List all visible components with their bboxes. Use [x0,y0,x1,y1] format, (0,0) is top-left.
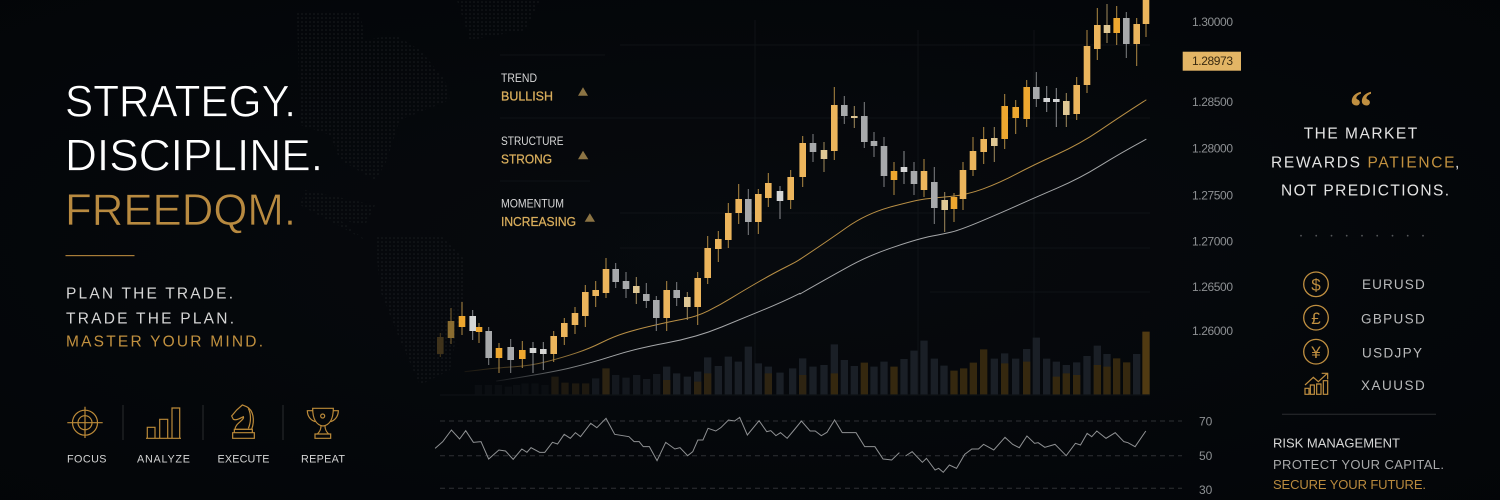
headline: DISCIPLINE. [65,132,323,181]
status: trend [501,73,588,104]
label: repeat: REPEAT [301,454,345,466]
RSI axis labels: 50 [1199,449,1213,463]
pair: USDJPY: USDJPY [1362,345,1422,360]
headline [65,78,323,235]
quote text: THE MARKET [1304,125,1418,142]
candlestick chart [437,0,1149,373]
pair: GBPUSD: GBPUSD [1361,311,1425,326]
volume bars [440,332,1150,395]
risk management note: RISK MANAGEMENT [1273,436,1400,451]
tagline [66,285,263,351]
icon: pound coin: £ [1311,309,1321,328]
icon: execute chess knight [232,405,254,438]
label: focus: FOCUS [67,454,106,466]
icon: analyze bars [146,408,181,438]
quote text [1271,125,1459,200]
quote text: , [1455,154,1459,171]
tagline: PLAN THE TRADE. [66,285,233,302]
icon: yen coin [1304,339,1328,364]
quote text: REWARDS [1271,154,1360,171]
icon: yen coin: ¥ [1310,343,1321,362]
risk management note: PROTECT YOUR CAPITAL. [1273,457,1444,472]
RSI levels [440,421,1182,488]
current price tag: 1.28973 [1192,54,1233,68]
risk management note: SECURE YOUR FUTURE. [1273,477,1426,492]
price axis: 1.28000 [1192,142,1233,156]
RSI axis labels: 70 [1199,414,1213,428]
current price tag [1183,52,1241,71]
quote text: PATIENCE [1368,154,1454,171]
icon: pound coin [1304,305,1328,330]
pair: EURUSD: EURUSD [1362,277,1425,292]
tagline: MASTER YOUR MIND. [66,334,263,351]
status: trend: TREND [501,73,537,85]
icon row dividers [123,405,283,440]
label: execute: EXECUTE [218,454,270,466]
icon: focus target [67,407,103,438]
RSI line [435,417,1146,472]
dotted separator [1301,235,1423,237]
price axis: 1.26500 [1192,280,1233,294]
price axis: 1.28500 [1192,95,1233,109]
icon: dollar coin: $ [1311,276,1321,294]
headline divider [66,255,134,256]
headline: FREEDQM. [65,186,296,235]
price axis: 1.30000 [1192,15,1233,29]
price axis: 1.27500 [1192,188,1233,202]
icon: gold growth chart [1305,373,1328,394]
risk management note [1273,436,1444,492]
RSI axis labels: 30 [1199,483,1213,497]
tagline: TRADE THE PLAN. [66,310,234,327]
world map dot background [297,0,540,385]
status: structure: STRONG [501,153,552,167]
icon: dollar coin [1304,272,1328,297]
status: structure: STRUCTURE [501,136,564,148]
icon: repeat trophy [307,408,338,438]
RSI axis labels [1199,414,1213,497]
quote text: NOT PREDICTIONS. [1281,183,1449,200]
headline: STRATEGY. [65,78,296,127]
price axis: 1.26000 [1192,324,1233,338]
status: structure [501,136,588,167]
status: momentum: INCREASING [501,215,576,229]
price axis [1192,15,1233,338]
moving average lines [465,100,1146,381]
label: analyze: ANALYZE [137,454,190,466]
status: trend: BULLISH [501,90,553,104]
grid lines [500,20,1150,395]
status: momentum [501,198,595,229]
right panel divider [1282,413,1436,415]
status: momentum: MOMENTUM [501,198,564,210]
pair: XAUUSD: XAUUSD [1361,378,1425,393]
icon: quote mark: “ [1350,81,1372,132]
price axis: 1.27000 [1192,235,1233,249]
